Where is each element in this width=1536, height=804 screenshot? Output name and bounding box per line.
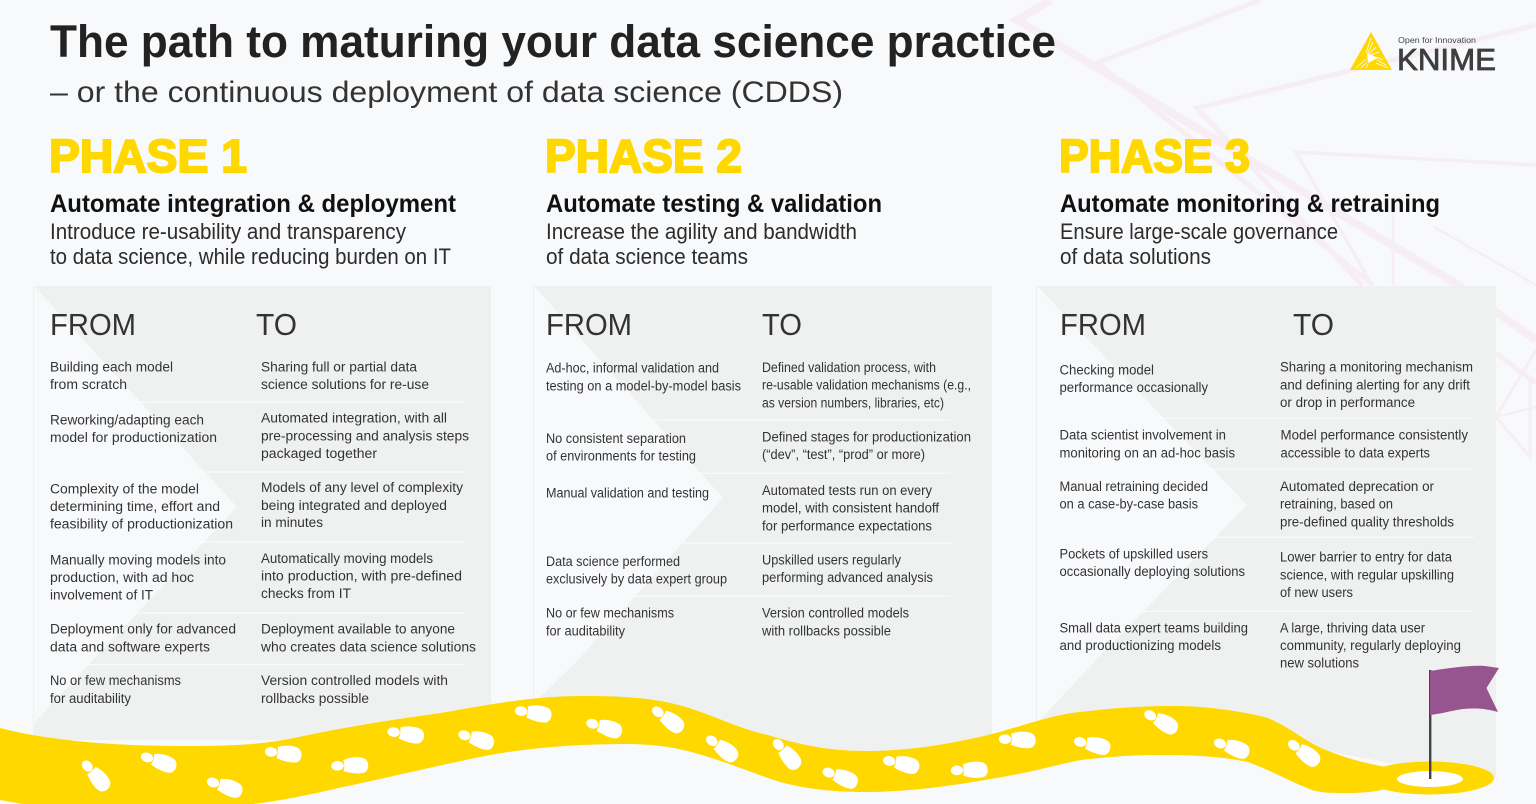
KNIME logo: Open for Innovation: [1398, 35, 1476, 45]
phase 3 header: [1059, 130, 1440, 269]
panel: phase 3 from/to: Checking model: [1060, 362, 1154, 377]
panel: phase 1 from/to: Complexity of the model: [50, 481, 199, 496]
panel: phase 1 from/to: Deployment available to anyone: [261, 622, 455, 636]
panel: phase 2 from/to: for performance expectations: [762, 518, 932, 533]
panel: phase 3 from/to: monitoring on an ad-hoc basis: [1060, 445, 1235, 460]
panel: phase 1 from/to: for auditability: [50, 691, 131, 706]
panel: phase 3 from/to: Lower barrier to entry for data: [1280, 550, 1453, 565]
panel: phase 1 from/to: checks from IT: [261, 586, 351, 601]
yellow winding path: [0, 696, 1494, 804]
panel: phase 3 from/to: retraining, based on: [1280, 497, 1393, 512]
panel: phase 3 from/to: science, with regular upskilling: [1280, 567, 1454, 582]
panel: phase 2 from/to: FROM: [546, 307, 632, 342]
flag: [1430, 666, 1499, 715]
panel: phase 1 from/to: into production, with pre-defined: [261, 568, 462, 584]
panel: phase 1 from/to: rollbacks possible: [261, 691, 369, 706]
phase 3 header: PHASE 3: [1059, 130, 1250, 182]
panel: phase 2 from/to: performing advanced analysis: [762, 570, 933, 585]
panel: phase 3 from/to: community, regularly deploying: [1280, 638, 1461, 653]
panel: phase 1 from/to: No or few mechanisms: [50, 673, 181, 688]
panel: phase 2 from/to: model, with consistent handoff: [762, 501, 939, 516]
panel: phase 1 from/to: packaged together: [261, 446, 378, 461]
panel: phase 3 from/to: Automated deprecation or: [1280, 479, 1435, 494]
phase 2 header: PHASE 2: [545, 130, 742, 182]
panel: phase 3 from/to: A large, thriving data user: [1280, 620, 1426, 635]
phase 2 header: of data science teams: [546, 244, 748, 269]
phase 1 header: PHASE 1: [49, 130, 247, 182]
footprints along the path: [77, 702, 1324, 800]
panel: phase 3 from/to: TO: [1293, 307, 1334, 342]
panel: phase 3 from/to: and defining alerting for any drift: [1280, 377, 1470, 392]
panel: phase 3 from/to: Model performance consistently: [1280, 428, 1468, 443]
phase 3 header: Ensure large-scale governance: [1060, 219, 1338, 244]
phase 1 header: Automate integration & deployment: [50, 190, 457, 218]
panel: phase 2 from/to: No or few mechanisms: [546, 606, 674, 621]
phase 3 header: Automate monitoring & retraining: [1060, 190, 1440, 218]
panel: phase 1 from/to: from scratch: [50, 377, 127, 392]
panel: phase 1 from/to: Reworking/adapting each: [50, 412, 204, 428]
panel: phase 3 from/to: pre-defined quality thresholds: [1280, 514, 1454, 529]
panel: phase 3 from/to: Pockets of upskilled users: [1060, 546, 1208, 561]
panel: phase 1 from/to: pre-processing and analysis steps: [261, 428, 469, 443]
panel: phase 3 from/to: occasionally deploying solutions: [1060, 564, 1245, 579]
KNIME logo: [1350, 32, 1496, 77]
panel: phase 2 from/to: as version numbers, libraries, etc): [762, 395, 944, 410]
panel: phase 2 from/to: TO: [762, 307, 802, 342]
phase 2 header: Increase the agility and bandwidth: [546, 219, 857, 244]
panel: phase 2 from/to: Manual validation and testing: [546, 486, 709, 501]
panel: phase 2 from/to: Version controlled models: [762, 606, 909, 621]
panel: phase 1 from/to: Manually moving models into: [50, 552, 226, 568]
panel: phase 1 from/to: Automatically moving models: [261, 551, 433, 566]
panel: phase 3 from/to: Sharing a monitoring mechanism: [1280, 360, 1473, 375]
panel: phase 1 from/to: determining time, effort and: [50, 499, 220, 514]
panel: phase 2 from/to: with rollbacks possible: [761, 623, 891, 638]
phase 1 header: to data science, while reducing burden on IT: [50, 244, 451, 269]
panel: phase 1 from/to: Version controlled models with: [261, 673, 448, 688]
KNIME logo: KNIME: [1397, 42, 1496, 77]
panel: phase 3 from/to: Data scientist involvement in: [1060, 428, 1226, 443]
panel: phase 2 from/to: re-usable validation mechanisms (e.g.,: [762, 378, 971, 393]
panel: phase 1 from/to: Models of any level of complexity: [261, 480, 463, 495]
panel: phase 2 from/to: Ad-hoc, informal validation and: [546, 361, 719, 376]
panel: phase 1 from/to: Building each model: [50, 360, 173, 374]
panel: phase 2 from/to: exclusively by data expert group: [546, 572, 727, 587]
panel: phase 3 from/to: [1036, 286, 1496, 778]
panel: phase 2 from/to: Automated tests run on every: [762, 483, 932, 498]
phase 1 header: Introduce re-usability and transparency: [50, 219, 406, 244]
panel: phase 1 from/to: Automated integration, with all: [261, 411, 447, 426]
phase 1 header: [49, 130, 457, 269]
panel: phase 1 from/to: feasibility of productionization: [50, 517, 233, 532]
panel: phase 3 from/to: and productionizing models: [1060, 638, 1221, 653]
panel: phase 1 from/to: involvement of IT: [50, 588, 153, 602]
panel: phase 1 from/to: [33, 286, 491, 740]
panel: phase 1 from/to: Deployment only for advanced: [50, 622, 236, 636]
flag pole: [1429, 670, 1431, 779]
panel: phase 1 from/to: being integrated and deployed: [261, 498, 447, 513]
panel: phase 3 from/to: Manual retraining decided: [1060, 479, 1208, 494]
panel: phase 3 from/to: FROM: [1060, 307, 1146, 342]
background geometric lines: [1017, 0, 1536, 457]
panel: phase 1 from/to: in minutes: [261, 515, 323, 530]
panel: phase 2 from/to: of environments for testing: [546, 449, 696, 464]
panel: phase 1 from/to: who creates data science solutions: [260, 640, 476, 654]
panel: phase 3 from/to: accessible to data experts: [1280, 445, 1430, 460]
subtitle: – or the continuous deployment of data science (CDDS): [50, 76, 843, 109]
panel: phase 1 from/to: data and software experts: [50, 640, 210, 654]
panel: phase 3 from/to: on a case-by-case basis: [1060, 497, 1198, 512]
panel: phase 3 from/to: new solutions: [1280, 656, 1359, 671]
panel: phase 3 from/to: of new users: [1280, 585, 1353, 600]
hole at the end of the path: [1397, 771, 1463, 787]
panel: phase 1 from/to: model for productionization: [50, 430, 217, 445]
panel: phase 3 from/to: or drop in performance: [1280, 395, 1415, 410]
panel: phase 1 from/to: production, with ad hoc: [50, 570, 194, 585]
panel: phase 2 from/to: No consistent separation: [546, 431, 686, 446]
panel: phase 2 from/to: Defined stages for productionization: [762, 429, 971, 444]
panel: phase 1 from/to: Sharing full or partial data: [261, 360, 418, 374]
phase 2 header: Automate testing & validation: [546, 190, 882, 218]
panel: phase 2 from/to: [533, 286, 992, 770]
panel: phase 2 from/to: (“dev”, “test”, “prod” or more): [762, 447, 925, 462]
panel: phase 3 from/to: performance occasionally: [1060, 380, 1208, 395]
panel: phase 2 from/to: Defined validation process, with: [762, 360, 936, 375]
panel: phase 1 from/to: TO: [256, 307, 297, 342]
phase 2 header: [545, 130, 882, 269]
panel: phase 2 from/to: testing on a model-by-model basis: [546, 378, 741, 393]
panel: phase 3 from/to: Small data expert teams building: [1060, 620, 1248, 635]
phase 3 header: of data solutions: [1060, 244, 1211, 269]
panel: phase 2 from/to: Data science performed: [546, 554, 680, 569]
panel: phase 1 from/to: science solutions for re-use: [261, 377, 429, 392]
panel: phase 2 from/to: for auditability: [546, 623, 625, 638]
title: The path to maturing your data science practice: [50, 16, 1056, 67]
panel: phase 2 from/to: Upskilled users regularly: [762, 552, 901, 567]
panel: phase 1 from/to: FROM: [50, 307, 136, 342]
